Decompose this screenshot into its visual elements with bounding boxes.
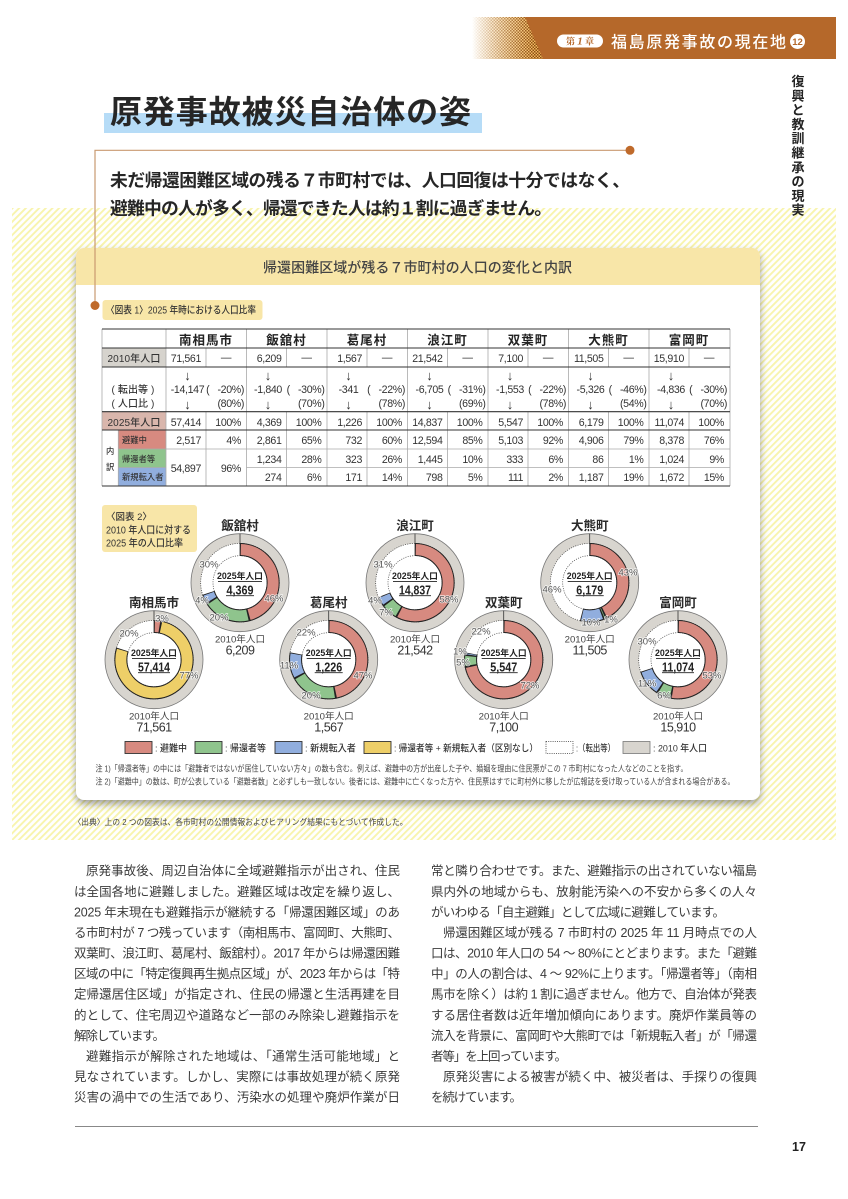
table: population breakdown: 100% xyxy=(296,417,322,429)
donut: 南相馬市: 南相馬市 xyxy=(129,595,179,610)
table: population breakdown: 333 xyxy=(506,454,523,466)
figure 2 tag: 2010 年人口に対する xyxy=(106,524,191,536)
donut: 富岡町: 11% xyxy=(638,679,657,690)
donut: 大熊町: 43% xyxy=(618,568,638,579)
donut: 浪江町: 2025年人口 xyxy=(392,570,438,581)
table: population breakdown: 帰還者等 xyxy=(122,454,155,464)
legend: : 避難中 xyxy=(155,742,187,754)
donut: 飯舘村: 30% xyxy=(199,560,219,571)
body text: right column: 口は、2010 年人口の 54 ～ 80%にとどまります。また「避難 xyxy=(431,946,757,960)
table: population breakdown: — xyxy=(543,352,554,364)
body text: right column: 帰還困難区域が残る 7 市町村の 2025 年 11 月時点での人 xyxy=(443,925,757,940)
donut: 大熊町: 大熊町 xyxy=(571,518,609,533)
table: population breakdown: 8,378 xyxy=(659,435,684,447)
table: population breakdown: 1,445 xyxy=(418,454,443,466)
table: population breakdown: 111 xyxy=(508,472,523,484)
body text: right column: がいわゆる「自主避難」として広域に避難しています。 xyxy=(431,904,725,919)
table: population breakdown: 1,234 xyxy=(257,454,282,466)
donut: 双葉町: 双葉町 xyxy=(485,595,523,610)
notes: 注 2)「避難中」の数は、町が公表している「避難者数」と必ずしも一致しない。後者には、避難中に亡くなった方や、住民票はすでに町村外に移したが広報誌を受け取っている人が含まれる場合がある。 xyxy=(96,776,734,786)
donut: 南相馬市: 57,414 xyxy=(138,660,171,675)
background hatch panel xyxy=(12,208,836,840)
donut: 富岡町: 2025年人口 xyxy=(655,647,701,658)
table: population breakdown: -6,705 xyxy=(416,384,444,396)
table: population breakdown: ↓ xyxy=(426,397,433,412)
table: population breakdown: ( xyxy=(528,384,532,396)
table: population breakdown: ↓ xyxy=(587,368,594,383)
lead text xyxy=(110,170,630,218)
table: population breakdown: -5,326 xyxy=(577,384,605,396)
table: population breakdown: 71,561 xyxy=(171,353,201,365)
legend: : 2010 年人口 xyxy=(653,742,707,754)
table: population breakdown: ( 人口比 ) xyxy=(112,397,154,410)
body text: right column: 県内外の地域からも、放射能汚染への不安から多くの人々 xyxy=(431,884,757,899)
donut: 葛尾村: 2025年人口 xyxy=(306,647,352,658)
table: population breakdown: ( xyxy=(609,384,613,396)
title: 原発事故被災自治体の姿 xyxy=(110,94,471,130)
lead text: 避難中の人が多く、帰還できた人は約１割に過ぎません。 xyxy=(110,198,552,218)
table: population breakdown: ↓ xyxy=(587,397,594,412)
table: population breakdown: ( xyxy=(287,384,291,396)
donut: 浪江町: 31% xyxy=(373,560,393,571)
table: population breakdown: 57,414 xyxy=(171,417,201,429)
table: population breakdown: ↓ xyxy=(507,397,513,412)
table: population breakdown: ( xyxy=(206,384,210,396)
donut: 南相馬市: 2010年人口 xyxy=(129,711,179,723)
body text: left column: は全国各地に避難しました。避難区域は改定を繰り返し、 xyxy=(74,884,400,899)
donut: 双葉町: 1% xyxy=(453,647,467,658)
donut: 富岡町: 6% xyxy=(657,691,671,702)
donut: 大熊町: 46% xyxy=(542,585,562,596)
donut: 富岡町: 15,910 xyxy=(660,721,696,735)
body text: left column: 災害の渦中での生活であり、汚染水の処理や廃炉作業が日 xyxy=(74,1090,400,1105)
table: population breakdown: 15,910 xyxy=(654,353,684,365)
table: population breakdown: 14% xyxy=(382,472,403,484)
table: population breakdown: 浪江町 xyxy=(427,332,468,348)
body text: left column xyxy=(74,863,400,1105)
table: population breakdown: 双葉町 xyxy=(508,332,548,348)
table: population breakdown: 171 xyxy=(345,472,362,484)
table: population breakdown: 86 xyxy=(592,454,604,466)
table: population breakdown: 南相馬市 xyxy=(179,332,233,348)
donut: 葛尾村: 47% xyxy=(353,671,373,682)
donut: 浪江町: 7% xyxy=(379,608,393,619)
table: population breakdown: ↓ xyxy=(507,368,513,383)
figure 1 tag: 〈図表 1〉2025 年時における人口比率 xyxy=(106,304,256,316)
donut: 双葉町: 5,547 xyxy=(490,660,517,675)
table: population breakdown: -22%) xyxy=(378,384,405,396)
donut: 南相馬市 xyxy=(105,595,203,735)
donut: 大熊町: 11,505 xyxy=(573,644,607,658)
body text: left column: 2025 年末現在も避難指示が継続する「帰還困難区域」のあ xyxy=(74,904,400,919)
table: population breakdown: ↓ xyxy=(345,397,352,412)
donut: 葛尾村: 葛尾村 xyxy=(310,595,348,610)
donut: 浪江町: 21,542 xyxy=(397,644,433,658)
header: chapter band: 12 xyxy=(792,37,803,48)
body text: right column: 者等」を上回っています。 xyxy=(431,1048,567,1063)
figure 2 tag: 2025 年の人口比率 xyxy=(106,536,183,550)
donut: 葛尾村: 22% xyxy=(296,628,316,639)
donut: 富岡町: 2010年人口 xyxy=(653,711,703,723)
table: population breakdown: ↓ xyxy=(345,368,352,383)
table: population breakdown: 100% xyxy=(457,417,483,429)
table: population breakdown: 9% xyxy=(709,454,725,466)
donut: 大熊町: 2025年人口 xyxy=(567,570,613,581)
table: population breakdown: (78%) xyxy=(539,398,566,410)
table: population breakdown: -20%) xyxy=(217,384,244,396)
header: chapter band: 第 1 章 xyxy=(566,36,594,48)
table: population breakdown: -30%) xyxy=(700,384,727,396)
table: population breakdown: 65% xyxy=(301,435,322,447)
lead text: 未だ帰還困難区域の残る７市町村では、人口回復は十分ではなく、 xyxy=(110,170,630,190)
table: population breakdown: 飯舘村 xyxy=(266,332,307,348)
donut: 飯舘村: 20% xyxy=(209,613,229,624)
table: population breakdown: 7,100 xyxy=(498,353,523,365)
table: population breakdown: — xyxy=(462,352,473,364)
body text: left column: 的として、住宅周辺や道路など一部のみ除染し避難指示を xyxy=(74,1007,400,1022)
table: population breakdown: 54,897 xyxy=(171,463,201,475)
table: population breakdown: — xyxy=(623,352,634,364)
table: population breakdown: 6,179 xyxy=(579,417,604,429)
table: population breakdown: (70%) xyxy=(298,398,324,410)
donut: 富岡町: 11,074 xyxy=(662,660,695,675)
body text: left column: 見なされています。しかし、実際には事故処理が続く原発 xyxy=(74,1069,400,1084)
donut: 双葉町: 2025年人口 xyxy=(481,647,527,658)
donut: 飯舘村: 2025年人口 xyxy=(217,570,263,581)
header: chapter band xyxy=(472,17,836,59)
table: population breakdown: — xyxy=(301,352,312,364)
donut: 南相馬市: 71,561 xyxy=(136,721,172,735)
donut: 大熊町: 1% xyxy=(604,615,618,626)
body text: left column: る市町村が 7 つ残っています（南相馬市、富岡町、大熊町、 xyxy=(74,925,400,940)
body text: right column: 原発災害による被害が続く中、被災者は、手探りの復興 xyxy=(443,1069,757,1084)
body text: left column: 原発事故後、周辺自治体に全域避難指示が出され、住民 xyxy=(86,863,400,878)
figure 2 tag: 〈図表 2〉 xyxy=(106,511,152,523)
donut: 富岡町: 30% xyxy=(637,637,657,648)
table: population breakdown: 85% xyxy=(462,435,483,447)
table: population breakdown: 79% xyxy=(623,435,644,447)
donut: 飯舘村: 6,209 xyxy=(226,644,255,658)
body text: left column: 避難指示が解除された地域は、「通常生活可能地域」と xyxy=(86,1048,400,1063)
table: population breakdown: 15% xyxy=(704,472,725,484)
figure 2 tag xyxy=(102,505,197,552)
donut: 飯舘村: 4% xyxy=(195,596,209,607)
table: population breakdown: 60% xyxy=(382,435,403,447)
donut: 飯舘村: 46% xyxy=(264,594,284,605)
donut: 葛尾村: 1,226 xyxy=(315,660,342,675)
table: population breakdown: 避難中 xyxy=(122,435,147,445)
table: population breakdown: ( xyxy=(367,384,371,396)
table: population breakdown: 内 xyxy=(106,446,114,456)
table: population breakdown: 96% xyxy=(221,463,242,475)
body text: left column: 区域の中に「特定復興再生拠点区域」が、2023 年からは「特 xyxy=(74,966,400,981)
donut: 双葉町: 2010年人口 xyxy=(479,711,529,723)
table: population breakdown: 1% xyxy=(629,454,644,466)
table: population breakdown: 2025年人口 xyxy=(108,416,160,429)
donut: 飯舘村: 飯舘村 xyxy=(221,518,259,533)
table: population breakdown: (78%) xyxy=(378,398,405,410)
table: population breakdown: 6,209 xyxy=(257,353,282,365)
table: population breakdown: 2% xyxy=(548,472,564,484)
table: population breakdown: 2,517 xyxy=(176,435,201,447)
table: population breakdown: — xyxy=(704,352,715,364)
table: population breakdown: -46%) xyxy=(620,384,646,396)
donut: 浪江町: 58% xyxy=(439,595,459,606)
table: population breakdown: — xyxy=(382,352,393,364)
panel heading band: 帰還困難区域が残る７市町村の人口の変化と内訳 xyxy=(263,260,572,276)
table: population breakdown: 26% xyxy=(382,454,403,466)
donut: 富岡町: 富岡町 xyxy=(659,595,697,610)
table: population breakdown: 1,024 xyxy=(659,454,684,466)
table: population breakdown: 1,567 xyxy=(337,353,362,365)
table: population breakdown: 100% xyxy=(215,417,242,429)
table: population breakdown: 4% xyxy=(226,435,242,447)
table: population breakdown: 大熊町 xyxy=(588,332,629,348)
table: population breakdown: 21,542 xyxy=(412,353,443,365)
table: population breakdown: -341 xyxy=(339,384,359,396)
table: population breakdown: -14,147 xyxy=(171,384,205,396)
table: population breakdown: 11,505 xyxy=(574,353,604,365)
donut: 大熊町: 10% xyxy=(581,618,601,629)
header: chapter band: 福島原発事故の現在地 xyxy=(611,34,786,52)
donut: 飯舘村 xyxy=(191,518,289,658)
table: population breakdown: 14,837 xyxy=(412,417,443,429)
table: population breakdown: 100% xyxy=(618,417,644,429)
donut: 葛尾村 xyxy=(280,595,378,735)
table: population breakdown: 富岡町 xyxy=(669,332,709,348)
donut: 葛尾村: 2010年人口 xyxy=(304,711,354,723)
table: population breakdown: (54%) xyxy=(620,398,646,410)
donut: 富岡町 xyxy=(629,595,727,735)
notes: 注 1)「帰還者等」の中には「避難者ではないが居住していない方々」の数も含む。例えば、避難中の方が出産した子や、婚姻を理由に住民票がこの 7 市町村になった人などのことを指す。 xyxy=(96,763,688,773)
table: population breakdown: — xyxy=(221,352,232,364)
body text: left column: 定帰還居住区域」が指定され、住民の帰還と生活再建を目 xyxy=(74,987,400,1002)
table: population breakdown: -1,840 xyxy=(254,384,282,396)
donut: 大熊町 xyxy=(541,518,639,658)
connector line with dots xyxy=(90,146,634,310)
donut: 飯舘村: 2010年人口 xyxy=(215,634,265,646)
donut: 葛尾村: 1,567 xyxy=(314,721,344,735)
table: population breakdown: 100% xyxy=(698,417,725,429)
source note: 〈出典〉上の 2 つの図表は、各市町村の公開情報およびヒアリング結果にもとづいて作成した。 xyxy=(74,817,408,827)
body text: right column: 常と隣り合わせです。また、避難指示の出されていない福島 xyxy=(431,863,757,878)
table: population breakdown: ( xyxy=(448,384,452,396)
table: population breakdown: 12,594 xyxy=(412,435,443,447)
donut: 葛尾村: 20% xyxy=(301,691,321,702)
table: population breakdown: 10% xyxy=(462,454,483,466)
donut: 浪江町: 浪江町 xyxy=(396,518,434,533)
table: population breakdown: (70%) xyxy=(700,398,727,410)
donut: 双葉町 xyxy=(453,595,553,735)
table: population breakdown: 732 xyxy=(345,435,362,447)
legend: : 帰還者等 + 新規転入者（区別なし） xyxy=(394,742,538,754)
legend: : 帰還者等 xyxy=(225,742,266,754)
donut: 葛尾村: 11% xyxy=(280,661,299,672)
donut: 飯舘村: 4,369 xyxy=(226,583,254,598)
body text: left column: 双葉町、浪江町、葛尾村、飯舘村）。2017 年からは帰還困難 xyxy=(74,946,400,960)
page number: 17 xyxy=(792,1140,806,1154)
table: population breakdown: -1,553 xyxy=(496,384,524,396)
table: population breakdown: -4,836 xyxy=(657,384,685,396)
table: population breakdown: 798 xyxy=(426,472,443,484)
body text: right column: 中」の人の割合は、4 ～ 92%に上ります。「帰還者等」（南相 xyxy=(431,966,757,981)
table: population breakdown: 1,226 xyxy=(337,417,362,429)
table: population breakdown: -22%) xyxy=(539,384,566,396)
donut: 双葉町: 22% xyxy=(471,627,491,638)
table: population breakdown: 5% xyxy=(468,472,483,484)
body text: right column: 流入を背景に、富岡町や大熊町では「新規転入者」が「帰還 xyxy=(431,1028,757,1043)
body text: right column: する居住者数は近年増加傾向にあります。廃炉作業員等の xyxy=(431,1007,757,1022)
donut: 浪江町: 14,837 xyxy=(399,583,431,598)
table: population breakdown: -30%) xyxy=(298,384,324,396)
footer rule xyxy=(75,1126,758,1127)
table: population breakdown: 6% xyxy=(307,472,322,484)
table: population breakdown: 11,074 xyxy=(654,417,684,429)
legend: : 新規転入者 xyxy=(305,742,356,754)
body text: right column xyxy=(431,863,757,1105)
table: population breakdown: 1,187 xyxy=(579,472,604,484)
table: population breakdown: ( xyxy=(689,384,693,396)
table: population breakdown: 2010年人口 xyxy=(108,352,160,365)
table: population breakdown: 5,103 xyxy=(498,435,523,447)
body text: left column: 解除しています。 xyxy=(74,1029,165,1043)
notes xyxy=(96,763,734,786)
table: population breakdown: -31%) xyxy=(459,384,486,396)
donut: 富岡町: 53% xyxy=(702,671,722,682)
table: population breakdown: 訳 xyxy=(106,462,115,472)
table: population breakdown: 5,547 xyxy=(498,417,523,429)
table: population breakdown: 6% xyxy=(548,454,564,466)
donut: 南相馬市: 20% xyxy=(119,629,139,640)
legend xyxy=(125,742,707,754)
donut: 双葉町: 7,100 xyxy=(489,721,519,735)
table: population breakdown: ↓ xyxy=(184,368,191,383)
donut: 南相馬市: 3% xyxy=(155,614,169,625)
table: population breakdown: 323 xyxy=(345,454,362,466)
table: population breakdown: ↓ xyxy=(668,397,674,412)
table: population breakdown: 274 xyxy=(265,472,282,484)
donut: 浪江町: 4% xyxy=(368,596,382,607)
donut: 南相馬市: 77% xyxy=(179,671,199,682)
table: population breakdown: (80%) xyxy=(217,398,244,410)
donut: 南相馬市: 2025年人口 xyxy=(131,647,177,658)
body text: right column: 馬市を除く）は約 1 割に過ぎません。他方で、自治体が発表 xyxy=(431,987,757,1002)
donut: 双葉町: 72% xyxy=(520,681,540,692)
table: population breakdown: 葛尾村 xyxy=(347,332,387,348)
donut: 双葉町: 5% xyxy=(456,658,470,669)
table: population breakdown: ↓ xyxy=(265,397,271,412)
donut: 浪江町 xyxy=(366,518,464,658)
table: population breakdown: ↓ xyxy=(184,397,191,412)
table: population breakdown: 28% xyxy=(301,454,322,466)
table: population breakdown: (69%) xyxy=(459,398,486,410)
table: population breakdown: 2,861 xyxy=(257,435,282,447)
side vertical heading: 復興と教訓継承の現実 xyxy=(791,74,805,218)
figure 1 tag xyxy=(102,300,262,320)
donut: 浪江町: 2010年人口 xyxy=(390,634,440,646)
table: population breakdown xyxy=(102,329,730,486)
donut: 大熊町: 6,179 xyxy=(576,583,603,598)
table: population breakdown: 76% xyxy=(704,435,725,447)
table: population breakdown: 92% xyxy=(543,435,564,447)
table: population breakdown: 新規転入者 xyxy=(122,472,164,482)
table: population breakdown: 100% xyxy=(376,417,403,429)
body text: right column: を続けています。 xyxy=(431,1091,522,1105)
legend: :（転出等） xyxy=(576,742,615,754)
panel: population figures xyxy=(76,248,760,800)
table: population breakdown: 100% xyxy=(537,417,564,429)
table: population breakdown: 19% xyxy=(623,472,644,484)
table: population breakdown: ↓ xyxy=(265,368,271,383)
table: population breakdown: 4,369 xyxy=(257,417,282,429)
donut: 大熊町: 2010年人口 xyxy=(565,634,615,646)
panel heading band xyxy=(76,248,760,285)
table: population breakdown: 1,672 xyxy=(659,472,684,484)
table: population breakdown: ( 転出等 ) xyxy=(112,383,154,396)
table: population breakdown: ↓ xyxy=(668,368,674,383)
table: population breakdown: ↓ xyxy=(426,368,433,383)
table: population breakdown: 4,906 xyxy=(579,435,604,447)
